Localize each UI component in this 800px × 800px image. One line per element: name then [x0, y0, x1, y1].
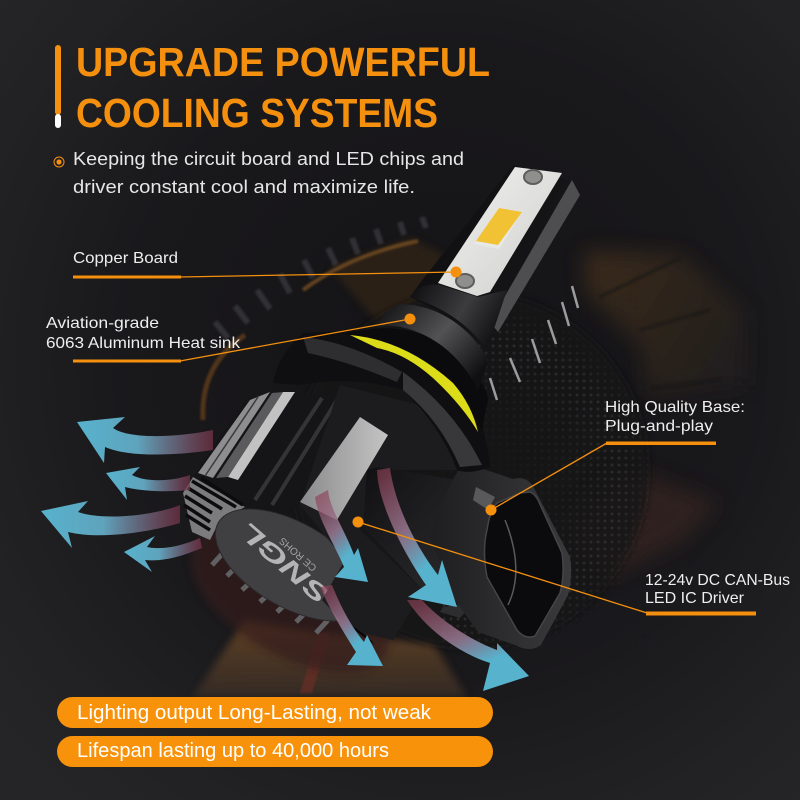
silver strip and driver body	[300, 385, 473, 645]
bulb illustration	[183, 165, 580, 649]
logo on heat sink: CE ROHS	[277, 535, 319, 573]
pill: lighting output	[57, 697, 493, 728]
LED chip	[474, 208, 522, 249]
callout: high quality base: High Quality Base:	[605, 399, 745, 416]
stick neck	[410, 284, 507, 350]
pill: lifespan	[57, 736, 493, 767]
description text: Keeping the circuit board and LED chips and	[73, 148, 464, 169]
title accent bar	[55, 45, 61, 128]
description text: driver constant cool and maximize life.	[73, 176, 415, 197]
callout: aluminum heat sink: 6063 Aluminum Heat sink	[46, 335, 241, 352]
callout: copper board	[73, 250, 462, 278]
callout: high quality base	[486, 399, 745, 516]
yellow ring	[350, 335, 478, 432]
flange	[273, 331, 490, 472]
callout: aluminum heat sink	[46, 314, 416, 362]
pill: lighting output: Lighting output Long-Lasting, not weak	[77, 702, 432, 724]
callout: CAN-Bus driver	[352, 516, 790, 616]
logo on heat sink	[234, 516, 335, 610]
heat sink	[183, 380, 387, 644]
stick side highlight	[490, 180, 580, 332]
LED stick	[410, 165, 580, 347]
callout: CAN-Bus driver: 12-24v DC CAN-Bus	[645, 572, 790, 589]
callout: CAN-Bus driver: LED IC Driver	[645, 590, 745, 607]
title	[76, 39, 490, 136]
bullet icon	[54, 157, 64, 167]
logo on heat sink: SNGL	[234, 516, 335, 610]
title: COOLING SYSTEMS	[76, 90, 438, 136]
title: UPGRADE POWERFUL	[76, 39, 490, 85]
striped rim	[183, 477, 245, 540]
description text	[73, 148, 464, 197]
callout: aluminum heat sink: Aviation-grade	[46, 315, 159, 332]
callout: copper board: Copper Board	[73, 250, 178, 267]
screws	[456, 170, 542, 288]
cooling arrows	[41, 417, 529, 691]
dark ring above yellow	[345, 328, 488, 430]
callout: high quality base: Plug-and-play	[605, 418, 713, 435]
LED circuit board	[438, 167, 562, 296]
disc fins	[212, 553, 328, 633]
collar	[377, 304, 487, 390]
socket	[430, 468, 571, 649]
pill: lifespan: Lifespan lasting up to 40,000 hours	[77, 740, 389, 762]
